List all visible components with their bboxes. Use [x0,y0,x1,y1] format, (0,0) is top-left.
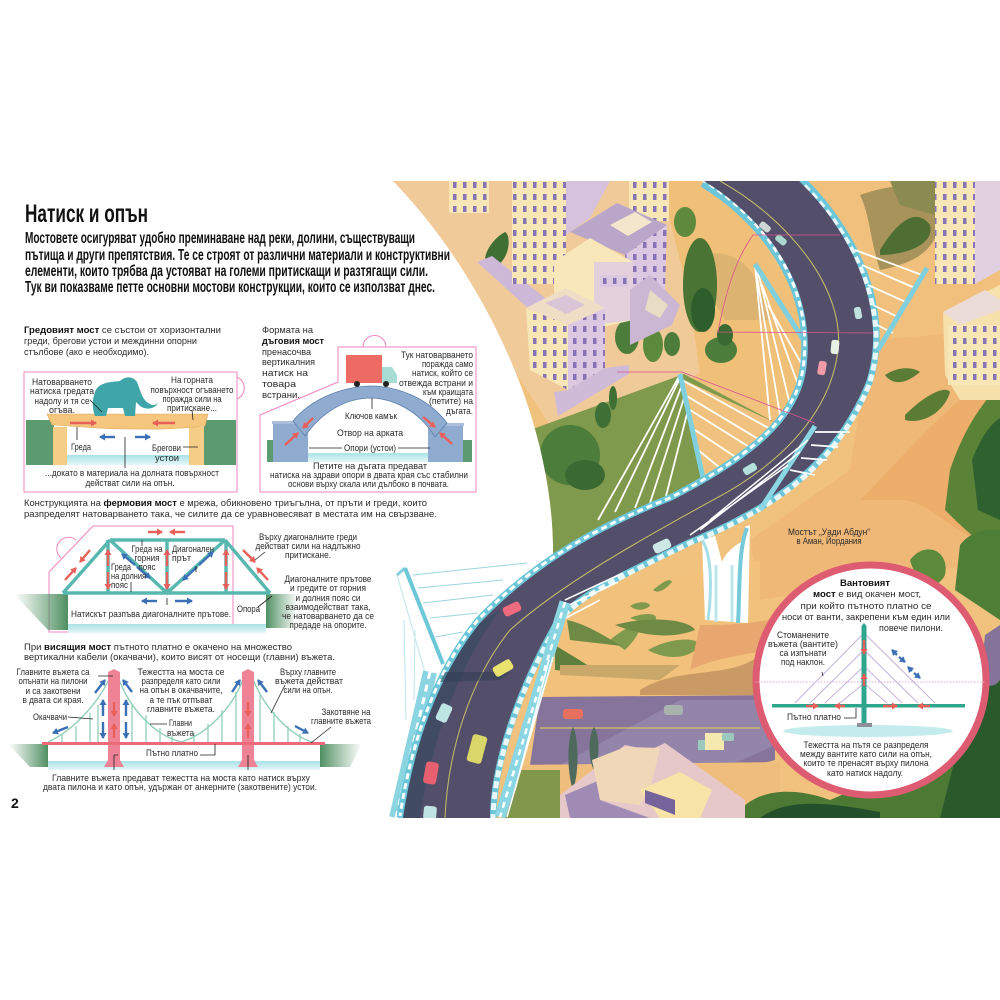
icon: elephant [93,377,158,416]
green pylons upright [680,264,810,478]
panel: truss bridge: Опора [237,604,261,614]
lower building [560,743,745,818]
illustration: Wadi Abdoun bridge [380,179,1000,821]
force arrows [285,417,452,445]
panel: beam bridge: поражда сили на [162,394,222,404]
main cables [48,677,312,742]
road centre line [445,181,839,818]
beam bridge description: Гредовият мост се състои от хоризонтални [24,325,221,335]
intro text [25,230,450,296]
beam bridge description: стълбове (ако е необходимо). [24,347,149,357]
bridge caption: Мостът „Уади Абдун“ [788,527,870,537]
suspension bridge diagram: главните въжета. [147,704,215,714]
stays [795,635,935,703]
dotted line [755,681,985,683]
water [66,455,189,465]
panel: arch bridge: Опори (устои) [344,443,396,453]
panel: beam bridge [24,372,244,492]
arch bridge description: товара [262,379,297,389]
intro text: пътища и други препятствия. Те се строят от различни материали и конструктивни [25,247,450,264]
panel: beam bridge: натиска гредата [30,386,95,396]
suspension bridge diagram: а те пък отпъват [150,695,213,705]
suspension bridge diagram: опънати на пилони [18,676,88,686]
truss notes: Диагоналните прътове [284,574,372,584]
panel: arch bridge: натиска на здрави опори в двата края със стабилни [270,470,468,480]
beam [47,414,208,429]
intro text: Мостовете осигуряват удобно преминаване над реки, долини, съществуващи [25,230,415,247]
left pylon and cables [396,563,527,818]
panel: cable-stayed bridge circle: като натиск надолу. [827,768,903,778]
abutments [273,424,463,462]
panel: arch bridge: основи върху скала или дълбоко в почвата. [288,479,449,489]
white backing behind left pylon [397,560,530,700]
page number: 2 [11,795,19,811]
suspension bridge description [24,642,335,662]
truss bridge description [24,498,437,519]
force arrows [65,532,268,601]
suspension bridge diagram: сили на опън. [284,685,332,695]
panel: beam bridge: Брегови [152,443,181,453]
arch bridge description: пренасочва [262,347,312,357]
suspension bridge diagram: Главните въжета са [16,667,90,677]
beam bridge description [24,325,221,357]
suspension bridge diagram: на опън в окачвачите, [140,685,222,695]
truss notes: притискане. [285,550,331,560]
pylon cables behind road [598,265,805,520]
arch [293,386,447,437]
panel: beam bridge: огъва. [49,405,75,415]
ground and landscape [380,181,1000,818]
panel: cable-stayed bridge circle: под наклон. [781,657,825,667]
pink construction lines [617,235,874,423]
suspension bridge diagram: в двата си края. [22,695,84,705]
intro text: Тук ви показваме петте основни мостови конструкции, които се използват днес. [25,279,435,296]
lower pylon and cables [500,573,623,817]
road deck [42,742,325,745]
truss bridge description: разпределят натоварването така, че силите да се уравновесяват в местата им на свързване. [24,509,437,519]
truss frame [63,540,270,593]
leaders [77,400,198,468]
panel: arch bridge: натиск, който се [412,368,473,378]
suspension bridge diagram: Закотвяне на [322,707,371,717]
panel: beam bridge: притискане... [167,403,217,413]
below-deck white pier [702,525,750,623]
beam bridge description: греди, брегови устои и междинни опорни [24,336,197,346]
panel: beam bridge: Греда [71,442,92,452]
truss notes: взаимодействат така, [286,602,370,612]
panel: arch bridge: към краищата [423,387,474,397]
truss notes: предаде на опорите. [290,620,366,630]
pylons [104,669,258,767]
suspension bridge diagram: Пътно платно [146,748,198,758]
truss notes [256,532,374,630]
suspension bridge diagram: Главните въжета предават тежестта на моста като натиск върху [52,773,310,783]
truss notes: и долния пояс си [296,593,360,603]
arch bridge description [262,325,324,400]
suspension bridge diagram: и са закотвени [26,686,80,696]
road rails [400,179,876,821]
suspension bridge description: При висящия мост пътното платно е окачено на множество [24,642,292,652]
water [68,624,266,633]
suspension bridge diagram: двата пилона и като опън, удържан от анкерните (закотвените) устои. [43,782,317,792]
sand and lower slope [754,560,760,598]
force arrows [70,423,175,437]
panel: cable-stayed bridge circle: Стоманените [777,630,829,640]
panel: truss bridge [14,526,298,633]
left buildings [449,181,489,213]
suspension bridge diagram: Тежестта на моста се [138,667,224,677]
title: Натиск и опън [25,200,148,228]
panel: arch bridge: поражда само [422,359,473,369]
panel: cable-stayed bridge circle: Тежестта на пътя се разпределя [804,740,929,750]
panel: cable-stayed bridge circle [755,565,986,795]
panel: cable-stayed bridge circle: въжета (вантите) [768,639,838,649]
truss notes: и гредите от горния [290,583,366,593]
truss notes: Върху диагоналните греди [259,532,357,542]
panel: cable-stayed bridge circle: при който пътното платно се [800,601,932,611]
arch bridge description: дъговия мост [262,336,324,346]
cars [423,220,862,821]
trees [683,238,717,332]
panel: beam bridge: Натоварването [32,377,92,387]
panel: cable-stayed bridge circle: са изпънати [780,648,826,658]
low wing [630,275,680,345]
abutments [53,427,204,465]
deck [772,704,965,708]
panel: arch bridge: Тук натоварването [401,350,473,360]
suspension bridge diagram: Главни [169,718,192,728]
middle block [554,238,633,330]
green banks [14,594,298,630]
bridge caption [788,527,870,546]
suspension bridge description: вертикални кабели (окачвачи), които висят от носещи (главни) въжета. [24,652,335,662]
base wall [554,365,629,416]
panel: beam bridge: устои [155,453,179,463]
hangers [62,692,300,742]
panel: truss bridge: Диагонален [172,544,214,554]
banks [8,744,362,767]
panel: cable-stayed bridge circle: повече пилони. [879,623,943,633]
road shadow band [440,672,510,682]
panel: arch bridge: дъгата. [446,406,473,416]
cypress trees [568,727,598,790]
intro text: елементи, които трябва да устояват на големи притискащи и разтягащи сили. [25,263,428,280]
suspension bridge diagram [8,667,372,792]
road deck [403,181,873,818]
panel: cable-stayed bridge circle: Вантовият [840,578,891,588]
roof block [625,225,667,290]
panel: truss bridge: горния [134,553,160,563]
road edge shade [403,610,500,818]
panel: beam bridge: действат сили на опън. [86,478,174,488]
arch bridge description: Формата на [262,325,314,335]
arch bridge description: вертикалния [262,357,315,367]
panel: cable-stayed bridge circle: мост е вид окачен мост, [813,589,921,599]
suspension bridge diagram: главните въжета [311,716,372,726]
panel: arch bridge: отвежда встрани и [399,378,473,388]
arch bridge description: натиск на [262,368,309,378]
panel: arch bridge: Ключов камък [345,411,398,421]
panel: arch bridge: Отвор на арката [337,428,404,438]
panel: beam bridge: повърхност огъването [150,385,234,395]
right buildings [935,181,975,284]
force arrows [53,680,308,738]
front building [526,308,568,390]
force arrows [806,640,930,706]
water [783,725,953,737]
panel: truss bridge: прът [172,553,192,563]
panel: truss bridge: пояс [111,580,128,590]
arch bridge description: встрани. [262,390,300,400]
water [48,761,320,770]
truss bridge description: Конструкцията на фермовия мост е мрежа, обикновено триъгълна, от пръти и греди, които [24,498,427,508]
panel: beam bridge: ...докато в материала на долната повърхност [45,468,220,478]
panel: beam bridge: На горната [171,375,214,385]
panel: cable-stayed bridge circle: между вантите като сили на опън, [800,749,932,759]
truss notes: действат сили на надлъжно [256,541,360,551]
purple highway [530,695,775,765]
panel: truss bridge: Греда на [132,544,163,554]
central pylon and cables over road [690,426,850,535]
icon: truck [346,355,397,387]
panel: arch bridge [260,336,476,492]
truss notes: че натоварването да се [282,611,374,621]
panel: truss bridge: Натискът разпъва диагоналните прътове. [71,609,231,619]
upper right pylon and cables [855,250,927,350]
green banks [267,440,472,462]
right-hand trees [735,680,1000,818]
bridge caption: в Аман, Йордания [796,535,862,546]
suspension bridge diagram: въжета [167,728,195,738]
panel: arch bridge: (петите) на [429,396,474,406]
panel: arch bridge: Петите на дъгата предават [313,461,428,471]
panel: cable-stayed bridge circle: носи от ванти, закрепени към един или [782,612,950,622]
panel: truss bridge: Греда [111,562,132,572]
suspension bridge diagram: Окачвачи [33,712,67,722]
suspension bridge diagram: въжета действат [275,676,344,686]
panel: truss bridge: на долния [111,571,146,581]
suspension bridge diagram: Върху главните [280,667,336,677]
suspension bridge diagram: разпределя като сили [142,676,220,686]
pylon [862,623,866,724]
panel: cable-stayed bridge circle: Пътно платно [787,712,841,722]
panel: truss bridge: пояс [138,562,156,572]
water [308,453,430,462]
panel: beam bridge: надолу и тя се [34,396,90,406]
panel: cable-stayed bridge circle: които те пренасят върху пилона [804,758,929,768]
